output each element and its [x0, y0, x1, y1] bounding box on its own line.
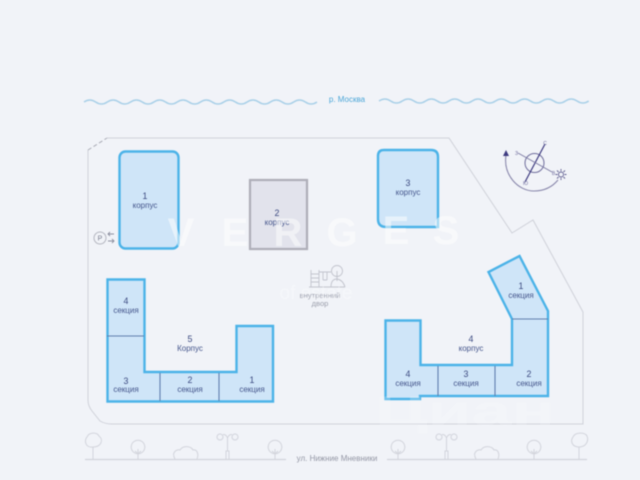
building 3: 3 [406, 178, 411, 188]
building 5: 2 [188, 375, 193, 385]
compass: С [543, 141, 547, 147]
building 3 [378, 150, 438, 227]
building 2: 2 [275, 208, 280, 218]
icon: round tree right [531, 449, 537, 459]
watermark: S [433, 209, 459, 253]
parking icon: P [98, 236, 103, 242]
watermark: E [222, 211, 248, 255]
cian watermark: Циан [375, 387, 555, 434]
building 4: корпус [459, 344, 483, 353]
building 5: секция [177, 385, 203, 394]
building 5: 5 [188, 334, 193, 344]
compass: Ю [523, 181, 528, 187]
icon: round tree [272, 449, 278, 459]
icon: big tree right [572, 433, 588, 459]
playground courtyard [300, 266, 345, 308]
icon: round tree [135, 449, 141, 459]
building 2: корпус [265, 218, 289, 227]
parking icon [94, 232, 114, 244]
building 3: корпус [396, 188, 420, 197]
building 4: секция [453, 379, 479, 388]
icon: street lamp [223, 434, 232, 459]
watermark: G [326, 211, 358, 255]
river wave left [84, 100, 317, 104]
watermark: R [274, 211, 303, 255]
building 5: секция [239, 385, 265, 394]
building 4: секция [508, 291, 534, 300]
building 1: 1 [143, 191, 148, 201]
building 5 [107, 280, 273, 402]
street line right [387, 458, 587, 460]
icon: playground [309, 266, 345, 287]
building 4: 4 [469, 334, 474, 344]
icon: big tree left [85, 433, 101, 459]
street line left [85, 458, 286, 460]
river label: р. Москва [329, 95, 366, 104]
icon: bush right [475, 447, 499, 459]
building 5: секция [113, 306, 139, 315]
building 1 [120, 152, 178, 248]
building 4: 3 [464, 369, 469, 379]
icon: street lamp right [442, 434, 451, 459]
street [85, 433, 588, 463]
building 1: корпус [133, 201, 157, 210]
building 2 [250, 180, 307, 249]
building 5: 1 [250, 375, 255, 385]
building 4: 4 [406, 369, 411, 379]
watermark [168, 209, 459, 304]
compass: В [552, 171, 556, 177]
site boundary [88, 138, 583, 424]
playground courtyard: двор [312, 299, 328, 308]
building 5: 3 [124, 376, 129, 386]
building 4 [386, 256, 548, 399]
building 5: 4 [124, 296, 129, 306]
river wave right [379, 99, 589, 103]
compass [503, 141, 566, 191]
building 4: секция [516, 379, 542, 388]
river [84, 95, 589, 104]
icon: round tree right [395, 449, 401, 459]
compass: З [515, 151, 518, 157]
building 4: 2 [527, 369, 532, 379]
street label: ул. Нижние Мневники [297, 454, 377, 463]
building 4: 1 [519, 281, 524, 291]
courtyard label: внутренний [300, 291, 340, 300]
watermark: of estate [280, 283, 352, 304]
building 5: Корпус [177, 344, 203, 353]
building 4: секция [395, 379, 421, 388]
watermark: V [168, 211, 195, 255]
building 5: секция [113, 385, 139, 394]
icon: sun [556, 169, 566, 180]
icon: bush [174, 447, 198, 459]
watermark: E [383, 209, 409, 253]
